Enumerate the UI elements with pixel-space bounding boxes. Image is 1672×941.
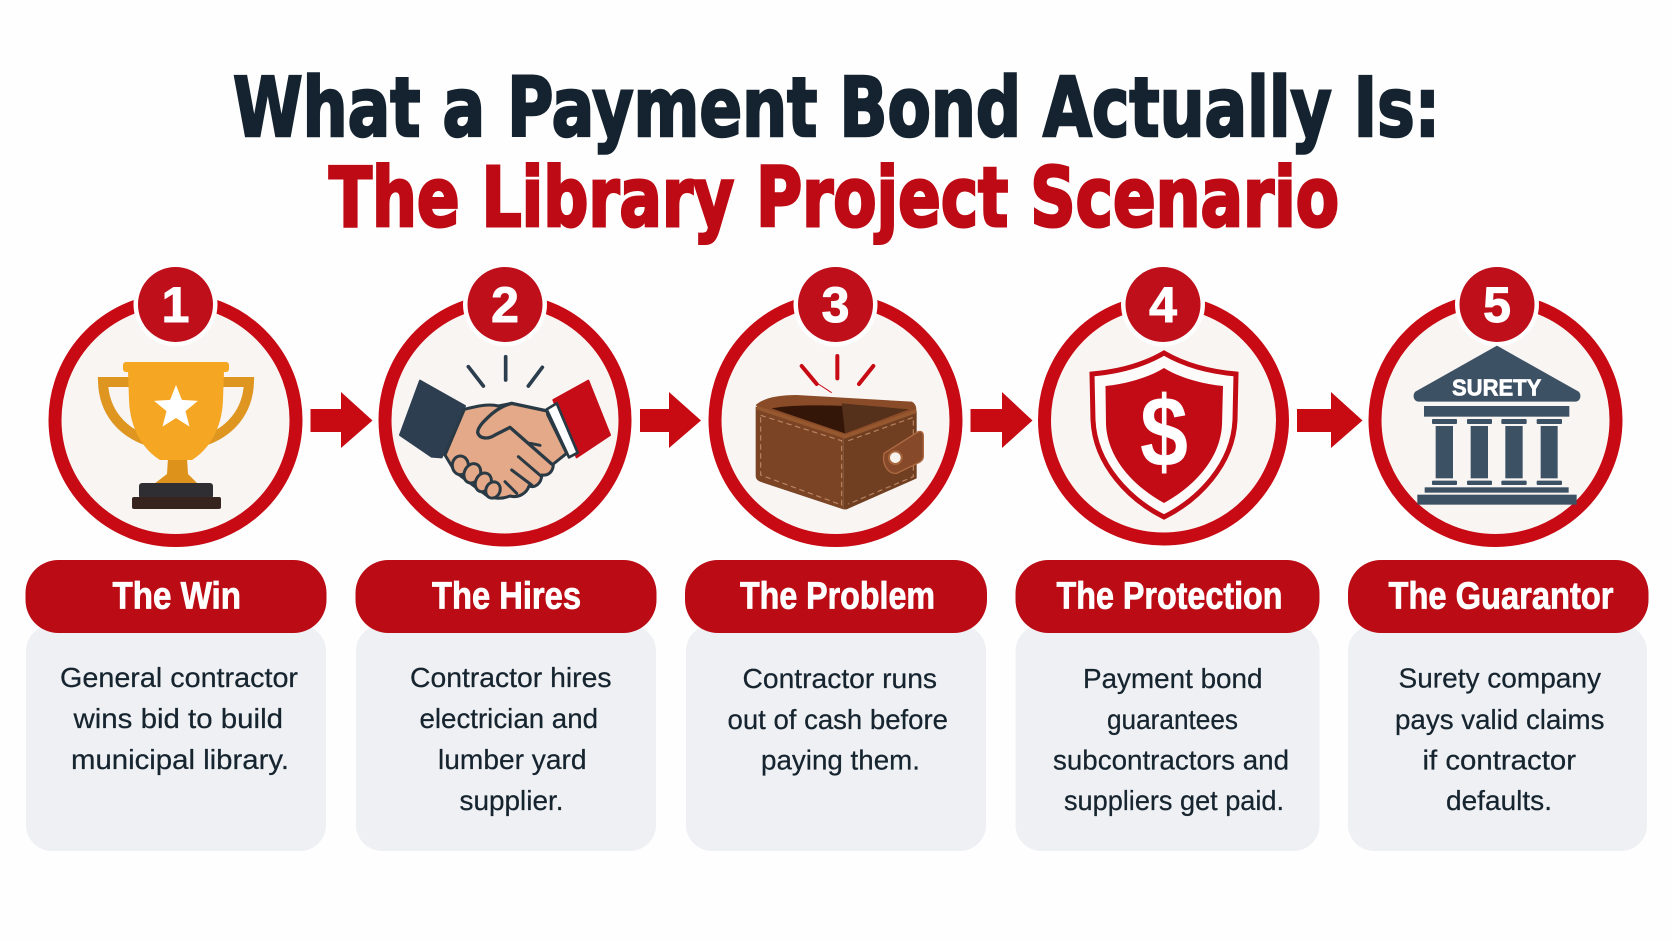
- heading pill 3: [685, 560, 987, 633]
- description card 4: subcontractors and: [1053, 744, 1289, 776]
- heading pill 4: The Protection: [1056, 576, 1282, 618]
- number badge 3: [794, 262, 878, 346]
- description card 5: [1348, 625, 1647, 851]
- description card 2: lumber yard: [438, 744, 586, 775]
- description card 2: electrician and: [420, 703, 598, 734]
- arrow 2 to 3: [640, 392, 701, 448]
- number badge 2: 2: [491, 277, 519, 333]
- heading pill 5: [1348, 560, 1648, 633]
- description card 1: wins bid to build: [72, 703, 283, 734]
- heading pill 1: The Win: [112, 576, 241, 618]
- icon: surety bank: SURETY: [1452, 375, 1541, 401]
- icon: trophy: [103, 362, 249, 509]
- description card 5: if contractor: [1422, 744, 1576, 776]
- ring 2: [385, 300, 625, 540]
- arrow 3 to 4: [970, 392, 1032, 448]
- description card 4: guarantees: [1107, 704, 1238, 735]
- description card 2: supplier.: [460, 785, 564, 816]
- description card 3: Contractor runs: [742, 663, 937, 694]
- icon: shield with dollar: [1092, 353, 1236, 517]
- description card 2: Contractor hires: [410, 662, 612, 693]
- number badge 4: [1121, 262, 1205, 346]
- description card 4: [1016, 625, 1320, 851]
- panel: step 4 the protection: [1016, 262, 1320, 851]
- description card 2: [356, 625, 656, 851]
- number badge 2: [463, 262, 547, 346]
- description card 1: [26, 625, 326, 851]
- arrow 4 to 5: [1297, 392, 1362, 448]
- description card 5: pays valid claims: [1395, 704, 1604, 735]
- ring 4: [1044, 301, 1282, 539]
- heading pill 5: The Guarantor: [1388, 576, 1614, 618]
- panel: step 3 the problem: [685, 262, 987, 851]
- panel: step 5 the guarantor: [1348, 262, 1648, 851]
- heading pill 2: [356, 560, 656, 633]
- icon: handshake: [400, 357, 610, 501]
- title: [233, 61, 1440, 246]
- icon: shield with dollar: $: [1140, 376, 1188, 488]
- description card 3: paying them.: [761, 744, 920, 776]
- ring 3: [715, 300, 956, 540]
- heading pill 2: The Hires: [432, 576, 581, 618]
- heading pill 1: [26, 560, 326, 633]
- number badge 4: 4: [1149, 277, 1177, 333]
- icon: empty wallet: [756, 356, 923, 509]
- description card 5: Surety company: [1398, 662, 1601, 694]
- icon: surety bank: [1414, 346, 1580, 505]
- number badge 3: 3: [822, 277, 849, 333]
- heading pill 3: The Problem: [740, 576, 935, 618]
- ring 5: [1375, 300, 1616, 540]
- title line 2: The Library Project Scenario: [329, 151, 1339, 246]
- panel: step 2 the hires: [356, 262, 656, 851]
- number badge 5: 5: [1483, 277, 1511, 333]
- ring 1: [55, 300, 296, 540]
- description card 3: [686, 625, 986, 851]
- heading pill 4: [1016, 560, 1320, 633]
- number badge 1: 1: [162, 277, 189, 333]
- description card 5: defaults.: [1446, 785, 1552, 816]
- description card 4: Payment bond: [1083, 663, 1262, 694]
- description card 4: suppliers get paid.: [1064, 785, 1284, 816]
- number badge 1: [134, 262, 218, 346]
- description card 1: municipal library.: [71, 744, 289, 775]
- number badge 5: [1455, 262, 1539, 346]
- description card 3: out of cash before: [728, 704, 948, 735]
- description card 1: General contractor: [60, 662, 298, 693]
- arrow 1 to 2: [310, 392, 372, 448]
- panel: step 1 the win: [26, 262, 326, 851]
